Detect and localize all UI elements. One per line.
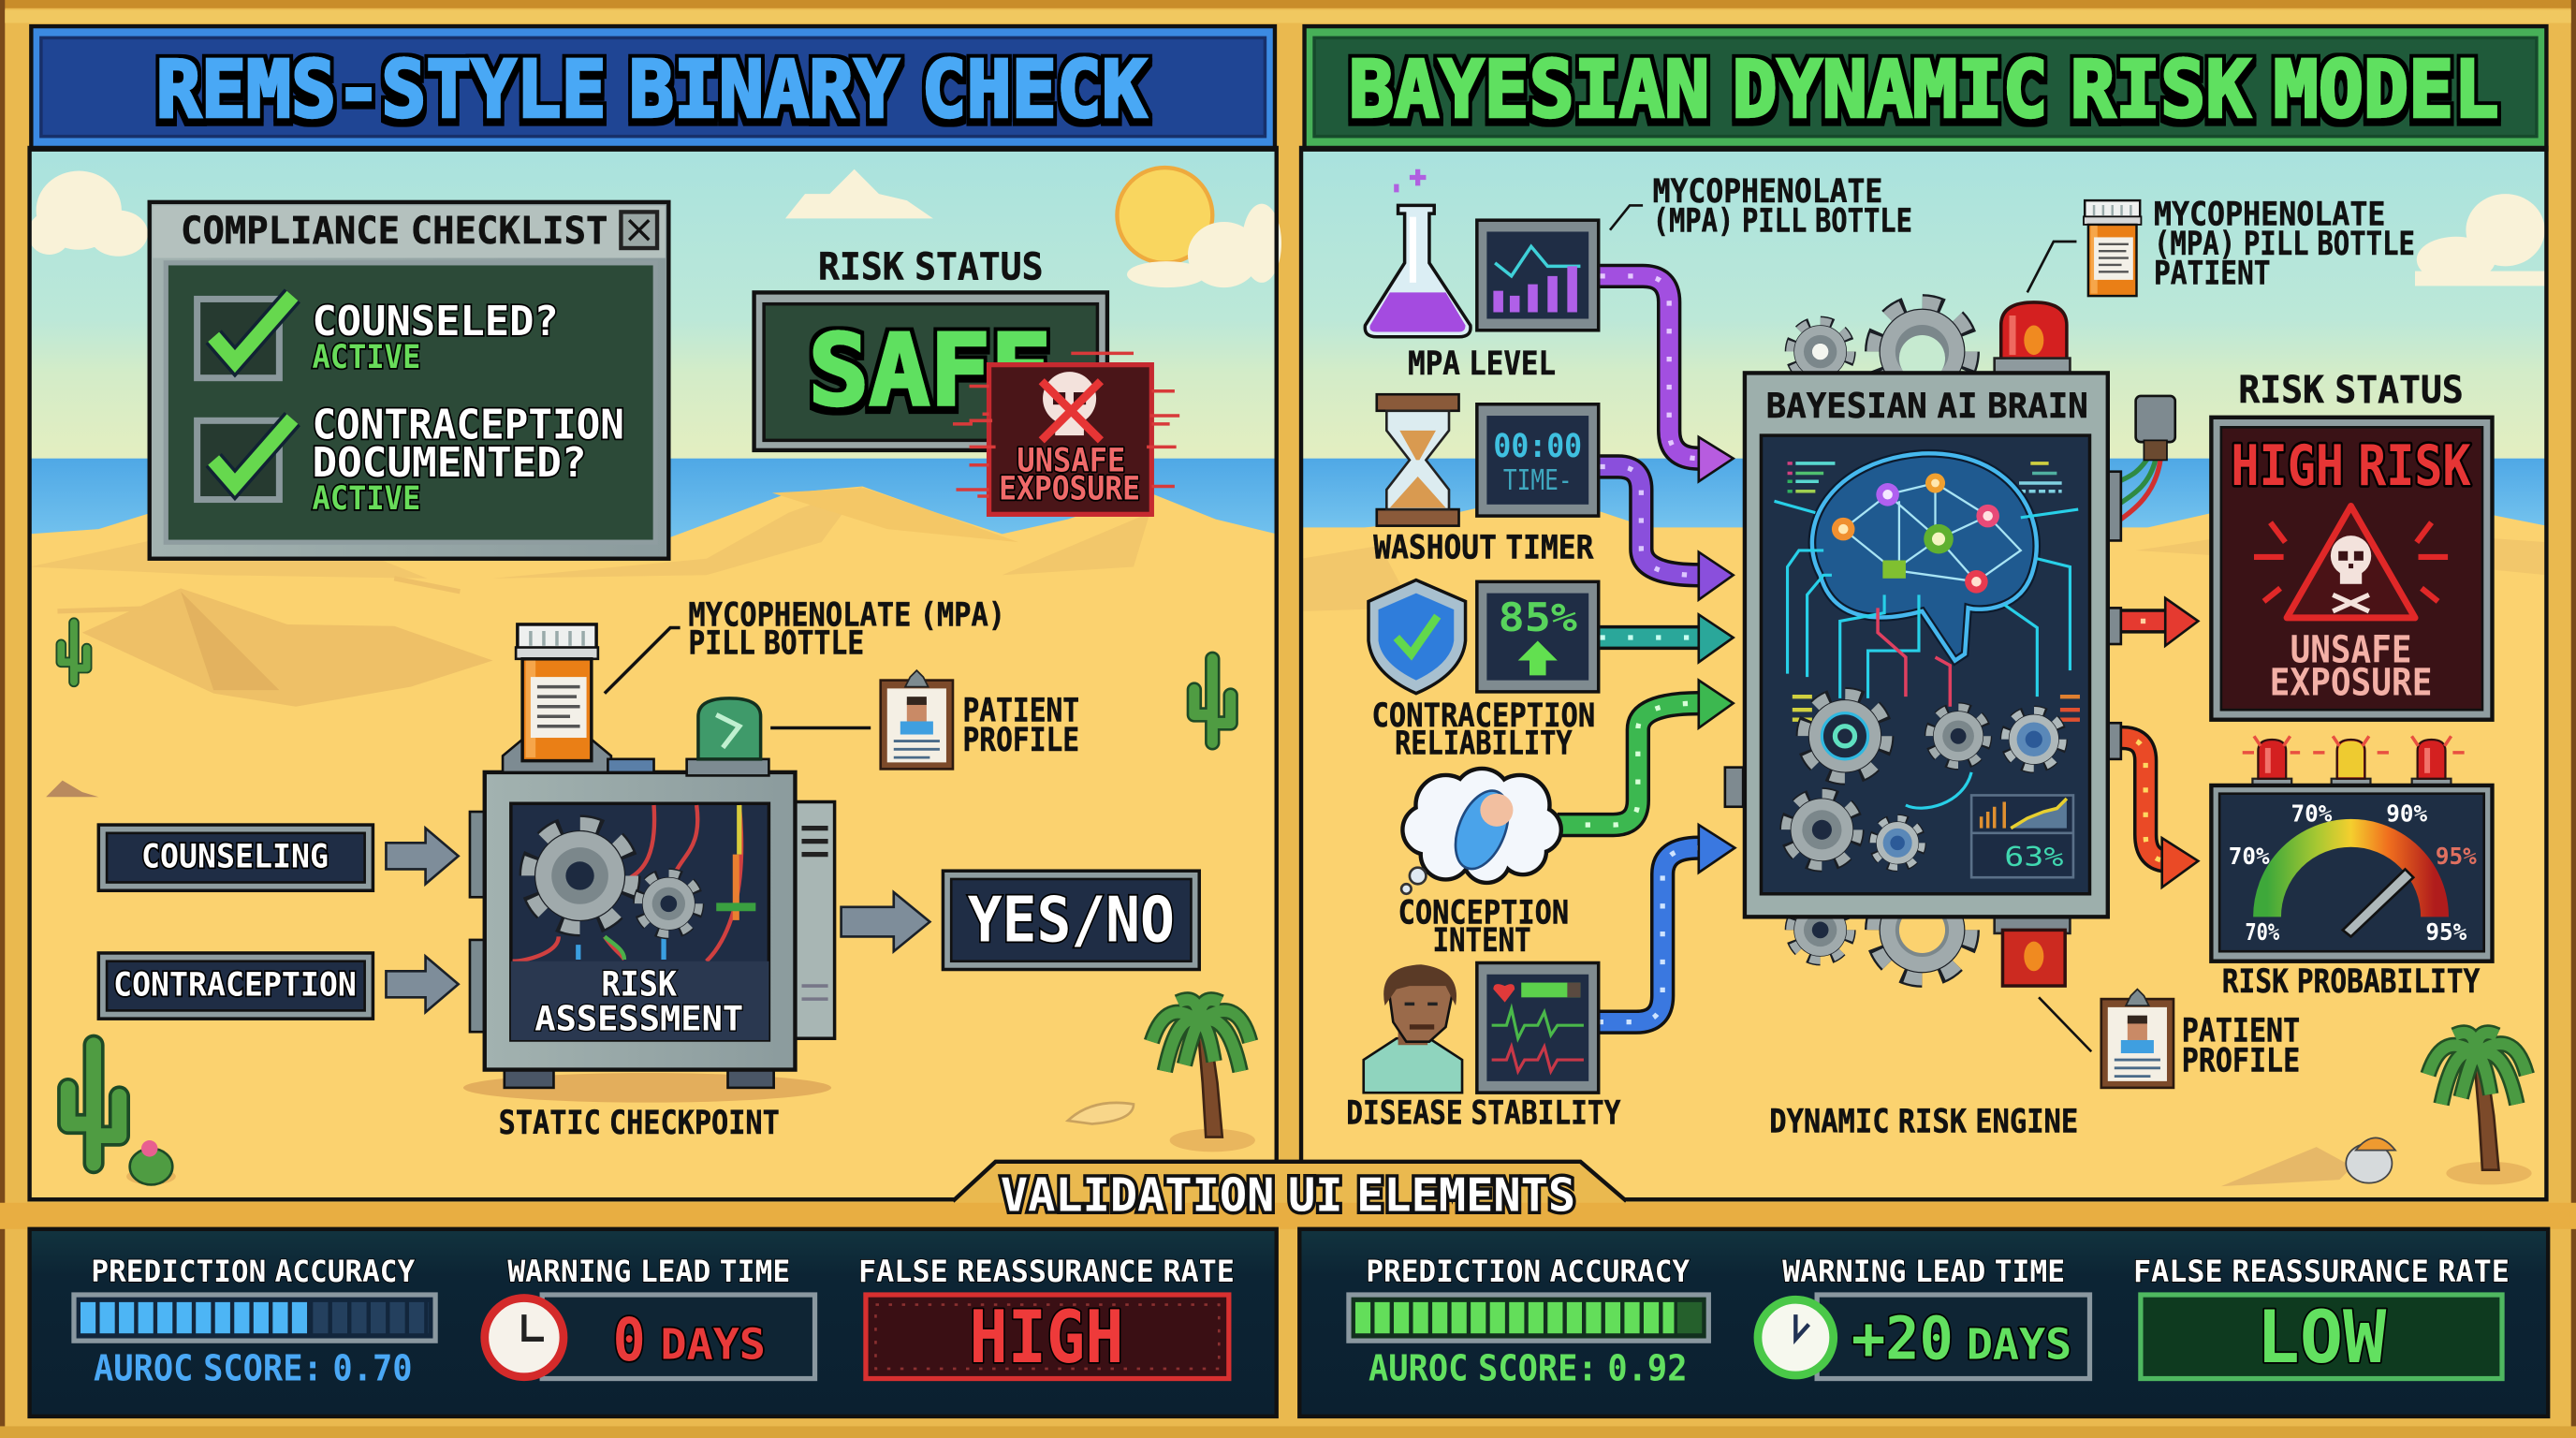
- circuit traces: [1775, 501, 2078, 808]
- check item: contraception documented: CONTRACEPTION: [312, 402, 624, 449]
- icon: small desert cactus: [61, 623, 87, 682]
- top gears: [1792, 304, 1969, 399]
- output: yes/no box: YES/NO: [968, 884, 1175, 957]
- label: pill bottle patient: PATIENT: [2154, 255, 2271, 293]
- metric: prediction accuracy: [1349, 1255, 1708, 1389]
- icon: pill bottle top right: [2084, 200, 2141, 296]
- gauge: risk probability: 70%: [2291, 800, 2333, 828]
- metric: warning lead time: WARNING LEAD TIME: [1782, 1255, 2065, 1289]
- check item: contraception documented: DOCUMENTED?: [312, 439, 587, 487]
- metric: prediction accuracy: [74, 1255, 435, 1389]
- icon: hourglass: [1377, 394, 1459, 526]
- label: pill bottle top: MYCOPHENOLATE: [1653, 172, 1882, 211]
- monitor: timer: [1477, 404, 1599, 516]
- label: pill bottle: PILL BOTTLE: [688, 624, 864, 663]
- icon: patient: [1364, 964, 1462, 1093]
- metric: false reassurance rate high: [858, 1255, 1235, 1380]
- risk status label: RISK STATUS: [2238, 368, 2464, 412]
- metric: false reassurance rate low: LOW: [2257, 1296, 2387, 1380]
- arrow: contraception to machine: [386, 956, 459, 1012]
- panel: compliance checklist window: [150, 202, 668, 559]
- icon: pill bottle on machine: [503, 624, 654, 772]
- title bar: REMS: REMS-STYLE BINARY CHECK: [156, 44, 1147, 136]
- input: counseling: [98, 825, 373, 890]
- check item: contraception documented: ACTIVE: [312, 479, 420, 518]
- monitor: MPA chart: [1477, 220, 1599, 330]
- mini chart readout: 63%: [2004, 842, 2064, 873]
- metric: warning lead time: [1758, 1255, 2089, 1379]
- risk assessment label: [511, 961, 768, 1040]
- checklist heading: COMPLIANCE CHECKLIST: [181, 209, 607, 253]
- brain engine: Bayesian AI brain: [1745, 373, 2108, 917]
- panel: Bayesian dynamic risk model: [1301, 26, 2546, 1199]
- pipe: washout timer purple: [1600, 466, 1734, 600]
- line to bottle: [2027, 242, 2076, 292]
- label: patient profile: PATIENT: [962, 691, 1079, 729]
- line to bottle label: [605, 627, 681, 694]
- check item: counseled: ACTIVE: [312, 338, 420, 376]
- machine: static checkpoint: [463, 772, 835, 1103]
- bottom gears: [1792, 883, 1969, 977]
- brain heading: BAYESIAN AI BRAIN: [1766, 386, 2088, 426]
- icon: clipboard: [2101, 990, 2174, 1088]
- icon: shield: [1368, 580, 1466, 694]
- banner: validation UI elements: VALIDATION UI ELEMENTS: [1001, 1168, 1575, 1223]
- label: risk probability: RISK PROBABILITY: [2222, 962, 2480, 1001]
- unsafe exposure alert: EXPOSURE: [999, 470, 1140, 508]
- gauge: risk probability: 90%: [2386, 800, 2427, 828]
- risk assessment label: RISK: [601, 964, 678, 1005]
- high risk status box: EXPOSURE: [2270, 660, 2432, 704]
- arrow: counseling to machine: [386, 829, 459, 884]
- metric: false reassurance rate high: FALSE REASSURANCE RATE: [858, 1255, 1235, 1289]
- pipe: conception green: [1558, 681, 1734, 825]
- pipe: contraception teal: [1600, 614, 1734, 662]
- gauge: risk probability: 95%: [2425, 918, 2466, 946]
- gauge: risk probability: 95%: [2436, 843, 2477, 870]
- checklist inner panel: [166, 263, 655, 542]
- line to patient profile: [770, 727, 871, 729]
- metric: false reassurance rate high: HIGH: [970, 1296, 1123, 1380]
- metric: false reassurance rate low: FALSE REASSURANCE RATE: [2133, 1255, 2510, 1289]
- label: pill bottle: [688, 596, 1005, 663]
- metric: warning lead time: 0: [613, 1305, 646, 1374]
- label: patient profile: PROFILE: [962, 721, 1079, 759]
- beacons above gauge: [2243, 736, 2465, 790]
- high risk status box: UNSAFE: [2291, 627, 2411, 671]
- banner: validation UI elements: [0, 1162, 2576, 1229]
- label: conception intent: [1398, 893, 1569, 960]
- check item: counseled: [198, 296, 559, 378]
- metric: false reassurance rate low: [2133, 1255, 2510, 1380]
- red traces: [1878, 608, 1950, 707]
- monitor: timer: 00:00: [1493, 427, 1582, 465]
- panel: REMS-style binary check: [28, 26, 1281, 1199]
- check item: contraception documented: [198, 402, 624, 518]
- icon: clouds: [28, 169, 1281, 287]
- left scene background: [30, 148, 1277, 1199]
- icon: conception intent thought bubble: [1401, 769, 1560, 894]
- mini chart readout: [1971, 795, 2073, 877]
- brain screen: [1761, 435, 2089, 894]
- pipe: output orange: [2113, 738, 2198, 888]
- label: disease stability: DISEASE STABILITY: [1346, 1093, 1620, 1132]
- metric: prediction accuracy: AUROC SCORE: 0.70: [94, 1347, 413, 1389]
- label: conception intent: INTENT: [1432, 921, 1531, 960]
- icon: palm tree: [2428, 1033, 2532, 1184]
- icon: right cactus: [1194, 659, 1231, 742]
- icon: shell: [1068, 1103, 1134, 1123]
- icon: flask: [1365, 169, 1471, 337]
- icon: green jar: [687, 698, 768, 775]
- input: contraception: CONTRACEPTION: [113, 966, 357, 1005]
- safe status box: [754, 292, 1107, 450]
- icon: neural brain: [1812, 453, 2037, 661]
- metric: warning lead time: [485, 1255, 815, 1379]
- safe status box: SAFE: [809, 313, 1051, 428]
- line to bottle label: [1610, 205, 1643, 230]
- pipe: output red: [2113, 598, 2198, 646]
- screen gears: [1788, 697, 2061, 866]
- pipe: disease stability blue: [1599, 825, 1734, 1022]
- top beacon: [1995, 302, 2070, 374]
- HUD: right metrics: [1299, 1229, 2548, 1416]
- metric: prediction accuracy: AUROC SCORE: 0.92: [1368, 1347, 1687, 1389]
- gears: [530, 826, 697, 932]
- monitor: vitals: [1477, 962, 1599, 1093]
- metric: prediction accuracy: PREDICTION ACCURACY: [1366, 1255, 1690, 1289]
- monitor: 85 percent: 85%: [1499, 594, 1578, 640]
- icon: sun: [1117, 168, 1212, 263]
- output: yes/no box: [943, 871, 1199, 970]
- label: pill bottle patient: MYCOPHENOLATE: [2154, 195, 2385, 233]
- gauge: risk probability: [2211, 785, 2492, 961]
- label: contraception reliability: [1372, 697, 1595, 763]
- connector nozzle: [2113, 396, 2175, 522]
- label: pill bottle patient: [2154, 195, 2415, 293]
- monitor: 85 percent: [1477, 581, 1599, 692]
- label: pill bottle top: [1653, 172, 1912, 240]
- risk assessment label: ASSESSMENT: [534, 998, 743, 1038]
- HUD: left metrics: [30, 1229, 1277, 1416]
- metric: warning lead time: WARNING LEAD TIME: [507, 1255, 790, 1289]
- label: patient profile: [962, 691, 1079, 759]
- icon: large cactus: [68, 1045, 119, 1164]
- close button: [621, 212, 657, 248]
- label: pill bottle patient: (MPA) PILL BOTTLE: [2154, 225, 2415, 263]
- icon: cloud: [2415, 194, 2546, 286]
- risk status label: RISK STATUS: [818, 244, 1043, 288]
- side connectors: [1725, 472, 2121, 807]
- indicators: [1793, 697, 2080, 720]
- metric: prediction accuracy: PREDICTION ACCURACY: [91, 1255, 415, 1289]
- label: washout timer: WASHOUT TIMER: [1373, 529, 1594, 567]
- title bar: REMS: [31, 26, 1275, 150]
- metric: warning lead time: +20: [1852, 1303, 1954, 1372]
- icon: half-buried pill bottle: [2221, 1137, 2395, 1186]
- right scene background: [1301, 148, 2546, 1199]
- pipe: MPA level purple: [1600, 276, 1734, 481]
- label: conception intent: CONCEPTION: [1398, 893, 1569, 932]
- high risk status box: HIGH RISK: [2231, 434, 2471, 499]
- check item: counseled: COUNSELED?: [312, 298, 559, 345]
- bottom beacon: [1995, 914, 2070, 986]
- label: patient profile: PROFILE: [2182, 1041, 2300, 1079]
- title bar: Bayesian: BAYESIAN DYNAMIC RISK MODEL: [1349, 44, 2499, 136]
- label: pill bottle: MYCOPHENOLATE (MPA): [688, 596, 1005, 635]
- label: patient profile: [2182, 1012, 2300, 1079]
- label: MPA level: MPA LEVEL: [1408, 345, 1556, 383]
- input: counseling: COUNSELING: [141, 838, 329, 876]
- icon: barrel cactus: [126, 1140, 176, 1184]
- unsafe exposure alert: UNSAFE: [1017, 442, 1125, 480]
- icon: clipboard: [881, 670, 953, 769]
- label: dynamic risk engine: DYNAMIC RISK ENGINE: [1769, 1102, 2078, 1140]
- label: contraception reliability: RELIABILITY: [1395, 725, 1573, 763]
- icon: rock: [46, 781, 98, 797]
- label: static checkpoint: STATIC CHECKPOINT: [499, 1104, 780, 1142]
- label: pill bottle top: (MPA) PILL BOTTLE: [1653, 201, 1912, 240]
- unsafe exposure alert: [953, 353, 1179, 514]
- gauge: risk probability: 70%: [2245, 918, 2279, 946]
- metric: warning lead time: DAYS: [661, 1319, 766, 1369]
- input: contraception: [98, 953, 373, 1019]
- gauge: risk probability: 70%: [2229, 843, 2270, 870]
- icon: palm tree: [1151, 1000, 1255, 1152]
- status text lines: [1788, 463, 2062, 492]
- label: contraception reliability: CONTRACEPTION: [1372, 697, 1595, 735]
- high risk status box: [2211, 418, 2492, 720]
- monitor: timer: TIME-: [1503, 464, 1573, 497]
- line to patient profile: [2039, 997, 2091, 1051]
- metric: warning lead time: DAYS: [1967, 1319, 2071, 1369]
- label: patient profile: PATIENT: [2182, 1012, 2300, 1050]
- arrow: machine to yes/no: [842, 892, 929, 951]
